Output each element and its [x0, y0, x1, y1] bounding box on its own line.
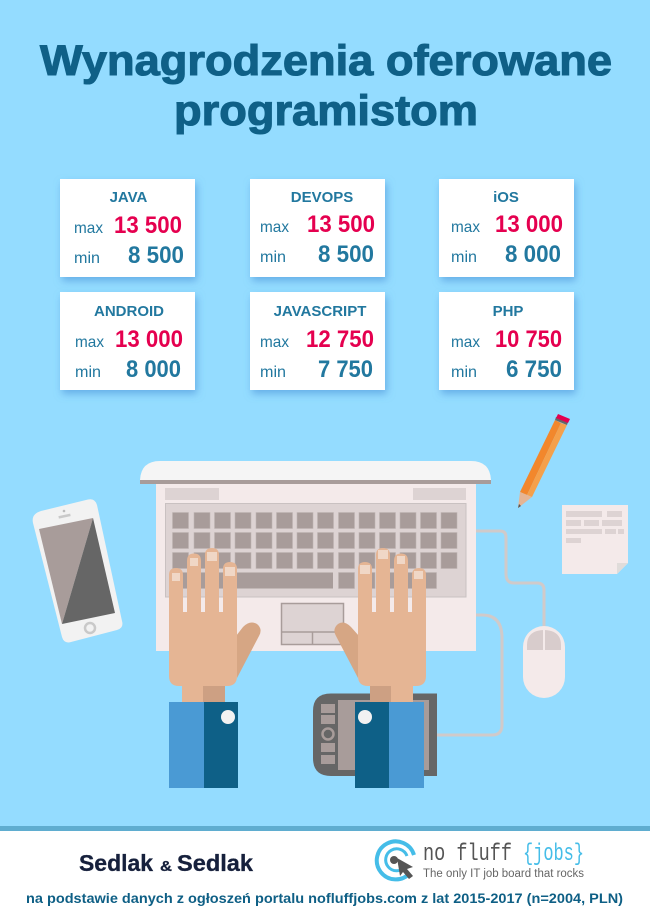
- logo: no fluff jobs: [377, 841, 584, 880]
- wrist: [391, 684, 413, 704]
- keyboard: [166, 504, 466, 597]
- thumb: [236, 623, 261, 678]
- icon: pencil: [518, 414, 570, 508]
- card: Android: 8 000: [126, 356, 181, 383]
- thumb: [334, 623, 359, 678]
- card: Android: [60, 292, 195, 390]
- card: PHP: 6 750: [506, 356, 562, 383]
- card: iOS: 13 000: [495, 211, 563, 238]
- card: DevOps: min: [260, 249, 286, 266]
- salary cards: [60, 179, 574, 390]
- logo: Sedlak & Sedlak: [79, 850, 253, 876]
- card: iOS: max: [451, 219, 480, 236]
- logo: no fluff jobs: no fluff: [423, 841, 512, 868]
- card: JavaScript: 7 750: [318, 356, 373, 383]
- icon: mouse: [523, 626, 565, 698]
- touchpad: [282, 604, 344, 644]
- icon: laptop: [140, 461, 491, 651]
- logo: no fluff jobs: The only IT job board that rocks: [423, 868, 584, 880]
- card: Java: min: [74, 250, 100, 267]
- title: Wynagrodzenia oferowane: [40, 37, 612, 85]
- source note: na podstawie danych z ogłoszeń portalu nofluffjobs.com z lat 2015-2017 (n=2004, PLN): [26, 891, 623, 907]
- card: JavaScript: JAVASCRIPT: [274, 303, 366, 320]
- card: PHP: max: [451, 334, 480, 351]
- palm and fingers: [358, 548, 426, 686]
- logo: no fluff jobs: {jobs}: [523, 841, 584, 868]
- icon: note: [562, 505, 628, 574]
- card: Java: 8 500: [128, 242, 184, 269]
- card: Android: min: [75, 364, 101, 381]
- card: Android: ANDROID: [94, 303, 164, 320]
- left sleeve: [169, 702, 238, 788]
- logo: Sedlak & Sedlak: &: [160, 858, 172, 875]
- logo: Sedlak & Sedlak: Sedlak: [177, 850, 253, 876]
- card: DevOps: max: [260, 219, 289, 236]
- footer: [0, 826, 650, 920]
- card: Java: 13 500: [114, 212, 182, 239]
- logo: Sedlak & Sedlak: Sedlak: [79, 850, 153, 876]
- wrist: [182, 684, 204, 704]
- cable: mouse: [476, 531, 544, 628]
- card: DevOps: [250, 179, 385, 277]
- card: iOS: iOS: [493, 189, 519, 206]
- icon: tablet: [313, 694, 437, 776]
- card: JavaScript: min: [260, 364, 286, 381]
- card: JavaScript: 12 750: [306, 326, 374, 353]
- card: JavaScript: max: [260, 334, 289, 351]
- left hand: [169, 548, 261, 788]
- card: DevOps: 13 500: [307, 211, 375, 238]
- palm and fingers: [169, 548, 237, 686]
- card: PHP: min: [451, 364, 477, 381]
- card: iOS: min: [451, 249, 477, 266]
- title: [40, 37, 612, 135]
- icon: smartphone: [33, 499, 122, 642]
- fingernails: [360, 550, 423, 579]
- card: Android: max: [75, 334, 104, 351]
- card: Android: 13 000: [115, 326, 183, 353]
- card: iOS: [439, 179, 574, 277]
- title: programistom: [174, 87, 478, 135]
- card: PHP: [439, 292, 574, 390]
- right sleeve: [355, 702, 424, 788]
- card: JavaScript: [250, 292, 385, 390]
- right hand: [334, 548, 426, 788]
- card: Java: max: [74, 220, 103, 237]
- card: Java: [60, 179, 195, 277]
- cable: tablet: [437, 615, 502, 735]
- card: DevOps: DEVOPS: [291, 189, 353, 206]
- card: DevOps: 8 500: [318, 241, 374, 268]
- card: Java: JAVA: [110, 189, 148, 206]
- card: iOS: 8 000: [505, 241, 561, 268]
- fingernails: [172, 552, 235, 581]
- card: PHP: PHP: [493, 303, 523, 320]
- card: PHP: 10 750: [495, 326, 562, 353]
